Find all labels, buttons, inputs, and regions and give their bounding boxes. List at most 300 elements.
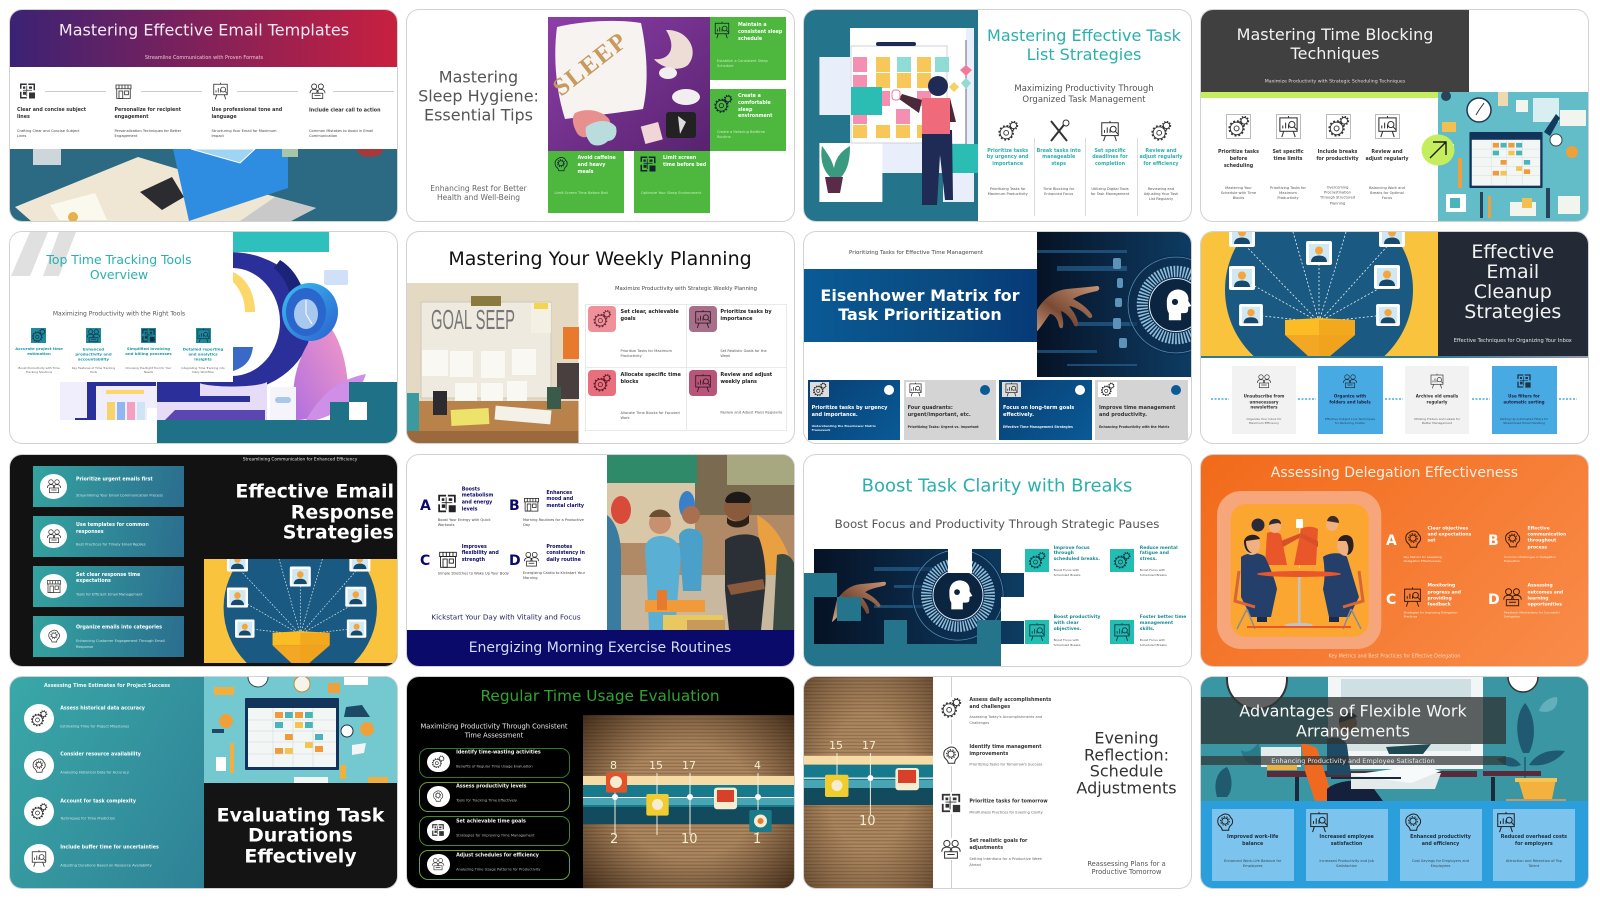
icon	[1256, 373, 1272, 389]
icon: review board	[1375, 114, 1400, 139]
panel: Mastering Your Weekly Planning	[407, 232, 794, 443]
item text: breaks: Procrastination	[1324, 191, 1351, 195]
item text: Boost Focus with	[1140, 568, 1165, 572]
subtitle: Enhancing Rest for Better	[430, 184, 527, 192]
item title: tool 1: Accurate project time	[15, 346, 63, 351]
matrix grid	[585, 304, 787, 431]
photo: hand reaching to digital head, blocky crop	[804, 549, 1025, 666]
title: Evaluating Task	[217, 804, 384, 826]
item text	[1140, 568, 1167, 578]
item title: Prioritize tasks for tomorrow	[969, 800, 1048, 805]
panel: Effective Email Response Strategies	[10, 455, 397, 666]
title: Sleep Hygiene:	[418, 86, 539, 106]
title: Boost Task Clarity with Breaks	[862, 476, 1132, 496]
icon	[40, 574, 67, 598]
title: Task Prioritization	[838, 305, 1002, 324]
item title: tool 3: and billing processes	[125, 351, 172, 356]
tile title	[1410, 835, 1471, 849]
tile text: Create a Relaxing Bedtime	[717, 130, 765, 134]
item text: Mindfulness Practices for Evening Clarity	[969, 810, 1043, 814]
item text: tool 4	[181, 367, 225, 375]
item title: opportunities	[1528, 602, 1562, 608]
item text: Key Metrics for Assessing	[1404, 555, 1442, 559]
tile: screen time	[634, 151, 710, 213]
tile title: Prioritize urgent emails first	[76, 478, 153, 483]
item text: limits: Prioritizing Tasks for	[1270, 186, 1306, 190]
item text	[1054, 568, 1080, 578]
tile title	[1329, 393, 1371, 405]
icon: strength	[438, 549, 458, 569]
item text: Day	[523, 523, 530, 527]
item text: Boost Focus with	[1140, 638, 1165, 642]
icon	[1342, 373, 1358, 389]
tile text: Tools for Efficient Email Management	[76, 592, 143, 596]
illustration: contacts to funnel	[204, 559, 397, 663]
item title: daily routine	[546, 558, 581, 563]
title: Mastering Effective Task	[987, 26, 1181, 44]
pill: adjust schedules	[419, 850, 570, 880]
item text: Estimating Time for Project Milestones	[60, 724, 129, 728]
item text: before scheduling: Schedule with Time	[1221, 191, 1256, 195]
item text: weekly review: Review and Adjust Plans Regularly	[720, 411, 782, 415]
panel: Evaluating Task Durations Effectively	[10, 677, 397, 888]
item title: objectives.	[1054, 627, 1081, 632]
tile title: Increased employee	[1319, 835, 1374, 840]
item text	[969, 856, 1042, 868]
item text: professional tone: Impact	[212, 134, 224, 138]
tile title: Unsubscribe from	[1244, 393, 1284, 398]
title: Mastering	[439, 68, 518, 86]
footer title band	[407, 630, 794, 666]
item title: Account for task complexity	[60, 799, 136, 804]
item text	[1404, 555, 1442, 563]
item text	[1504, 612, 1560, 619]
item text: goals: Prioritize Tasks for Maximum	[620, 349, 672, 353]
tile title: responses	[76, 530, 104, 535]
item title: and energy	[462, 501, 492, 506]
icon: tool 1	[31, 328, 46, 343]
tile text: Enhancing Productivity with the Matrix	[1099, 425, 1169, 429]
item text: breaks: Overcoming	[1327, 186, 1348, 190]
item text: Scheduled Breaks	[1140, 643, 1167, 647]
icon	[1516, 373, 1532, 389]
tile title: expectations	[76, 580, 111, 585]
title: Reflection:	[1084, 745, 1169, 764]
subtitle	[1014, 84, 1154, 105]
subtitle: Maximizing Productivity Through Consistent	[420, 722, 568, 730]
title block	[1438, 232, 1588, 356]
footer subtitle: Key Metrics and Best Practices for Effective Delegation	[1329, 654, 1460, 660]
item title: through	[1054, 551, 1074, 556]
item text	[1054, 638, 1080, 648]
item title	[546, 490, 584, 511]
tile title: regularly	[1427, 399, 1447, 404]
badge	[980, 385, 990, 395]
icon: call to action	[310, 84, 326, 99]
icon	[40, 624, 67, 648]
tile title: comfortable	[738, 101, 771, 106]
item text: Adjusting Durations Based on Resource Availability	[60, 863, 152, 867]
chart: timeline on wood	[583, 715, 794, 888]
panel: Mastering Time Blocking Techniques	[1201, 10, 1588, 220]
item title: progress and	[1428, 590, 1461, 595]
tile: time management	[1095, 380, 1188, 440]
pill text: Strategies for Improving Time Management	[456, 834, 535, 838]
item text: review: Reviewing and	[1148, 187, 1174, 191]
item title: review: adjust regularly	[1139, 155, 1183, 160]
item title: fatigue and	[1140, 551, 1169, 556]
icon: review gear	[1151, 120, 1172, 141]
item title	[1428, 584, 1461, 609]
timeline rule	[950, 677, 952, 888]
item title: deadlines: deadlines for	[1092, 155, 1128, 160]
icon: schedule	[714, 22, 730, 38]
item text: Morning	[523, 576, 538, 580]
icon: skills	[1110, 620, 1134, 644]
tile text: Employees	[1431, 864, 1450, 868]
item text: Scheduled Breaks	[1140, 573, 1167, 577]
tile title: Use filters for	[1508, 393, 1540, 398]
accent bar	[1201, 92, 1438, 98]
tile: comfortable environment	[710, 89, 786, 151]
tile title: automatic sorting	[1503, 399, 1545, 404]
item title: time blocks: blocks	[620, 379, 638, 385]
item title: Assess daily accomplishments	[969, 698, 1051, 703]
tile text: Setting Up Automated Filters for	[1500, 417, 1548, 421]
item title: tool 1	[15, 346, 63, 356]
title: Effectively	[244, 845, 357, 867]
tile text	[1506, 859, 1562, 869]
connector lines	[45, 90, 397, 92]
item title: breaks: Include breaks	[1318, 150, 1357, 155]
item text: review	[1144, 187, 1178, 202]
icon: time blocks	[588, 370, 616, 396]
item text: tool 4: Integrating Time Tracking into	[181, 366, 225, 370]
subtitle: Maximize Productivity with Strategic Weekly Planning	[615, 286, 757, 292]
item text: Scheduled Breaks	[1054, 643, 1080, 647]
divider band	[1201, 356, 1588, 358]
header block	[1201, 10, 1469, 92]
tile title: Four quadrants:	[908, 405, 953, 411]
panel: Evening Reflection: Schedule Adjustments	[804, 677, 1191, 888]
tile text: Optimize Your Sleep Environment	[641, 191, 701, 195]
icon: accomplishments	[940, 697, 962, 719]
item title: tool 2	[75, 346, 112, 361]
item title: subject lines: lines	[17, 115, 30, 120]
icon	[810, 382, 829, 397]
tile: urgent emails	[33, 466, 184, 507]
tile title	[1099, 405, 1175, 419]
tile text: for Reducing Clutter	[1335, 421, 1365, 425]
item text: personalize	[114, 128, 182, 138]
item title: weekly review: Review and adjust	[720, 372, 772, 378]
title: Top Time Tracking Tools	[46, 252, 192, 267]
icon: metabolism	[436, 493, 458, 514]
tile text: Routine	[717, 135, 731, 139]
tile text: Utilizing Folders and Labels for	[1414, 417, 1460, 421]
tile text: Enhanced Work-Life Balance for	[1224, 859, 1281, 863]
tile title: and importance.	[812, 412, 858, 418]
pill: wasting activities	[419, 748, 570, 778]
item text: review: Focus	[1382, 196, 1392, 200]
title: Durations	[248, 824, 353, 846]
icon: routine	[523, 549, 540, 569]
item title: breaks	[1316, 150, 1359, 164]
header band	[10, 10, 397, 67]
item title: review: adjust regularly	[1365, 157, 1409, 162]
item title: limits: Set specific	[1272, 150, 1304, 155]
item title: importance: Prioritize tasks by	[720, 309, 772, 315]
tile title	[812, 405, 887, 419]
tile title: Improve time management	[1099, 405, 1175, 411]
subtitle: Effective Techniques for Organizing Your Inbox	[1454, 338, 1572, 344]
tile text: Increased Productivity and Job	[1319, 859, 1374, 863]
icon: complexity	[24, 797, 54, 826]
tile title	[738, 22, 782, 42]
illustration: person at flexible desk	[1201, 677, 1588, 801]
tile title: Maintain a	[738, 23, 767, 28]
icon	[1495, 811, 1517, 833]
item text	[523, 571, 585, 581]
item text: Morning Routines for a Productive	[523, 518, 584, 522]
item title: throughout	[1528, 539, 1556, 544]
tile: caffeine	[548, 151, 624, 213]
tile title: meals	[578, 170, 594, 175]
tile title	[76, 573, 140, 586]
tile title	[1501, 835, 1567, 849]
illustration: person at task board	[804, 10, 978, 221]
tile text	[1412, 859, 1469, 869]
item title: flexibility and	[462, 551, 499, 556]
tile text	[1500, 417, 1548, 425]
item title: learning	[1528, 596, 1549, 601]
tile title: Organize emails into categories	[76, 626, 162, 631]
item text: review: Balancing Work and	[1369, 186, 1405, 190]
chart labels: numbers	[829, 737, 889, 832]
item text: importance: Set Realistic Goals for the	[720, 349, 767, 353]
icon: objectives	[1025, 620, 1049, 644]
item text: deadlines: Utilizing Digital Tools	[1091, 187, 1129, 191]
item title: deadlines: Set specific	[1094, 148, 1126, 153]
item text: Feedback Mechanisms for Successful	[1504, 611, 1560, 615]
panel: Regular Time Usage Evaluation	[407, 677, 794, 888]
item title: Assessing	[1528, 584, 1553, 589]
item title: outcomes and	[1528, 590, 1563, 595]
title	[1464, 242, 1561, 322]
subtitle: Streamline Communication with Proven Formats	[145, 55, 263, 61]
item text: subject lines	[17, 128, 80, 138]
item text: subject lines: Crafting Clear and Concise Subject	[17, 128, 80, 132]
tile text: Effective Time Management Strategies	[1003, 425, 1073, 429]
item text: limits: Maximum	[1279, 191, 1297, 195]
tile: archive	[1405, 366, 1469, 434]
item text: Energizing Cardio to Kickstart Your	[523, 571, 585, 575]
panel: Energizing Morning Exercise Routines	[407, 455, 794, 666]
item title	[462, 487, 493, 514]
subtitle: Reassessing Plans for a	[1087, 860, 1166, 868]
letter B: B	[509, 498, 520, 514]
item title: before scheduling	[1218, 150, 1259, 170]
tile title: urgent/important, etc.	[908, 412, 971, 418]
item text: call to action	[309, 128, 373, 138]
tile text	[717, 130, 765, 139]
icon: personalize	[116, 84, 132, 99]
chart labels: bottom numbers: 1	[753, 832, 761, 847]
item title: tool 4: Detailed reporting	[183, 346, 223, 351]
item text: review	[1369, 186, 1405, 201]
item title: Improves	[462, 544, 487, 549]
item title	[969, 698, 1051, 712]
tile title: Prioritize tasks by urgency	[812, 405, 887, 411]
tile: employee satisfaction	[1306, 809, 1388, 881]
item text: time blocks	[620, 411, 680, 421]
tile title	[1003, 405, 1074, 419]
item title: tool 2: productivity and	[75, 351, 112, 356]
item text: Ahead	[969, 863, 981, 867]
icon	[1214, 811, 1236, 833]
item title: importance: importance	[720, 316, 752, 322]
item text: breaks: Planning	[1330, 201, 1345, 205]
letter C: C	[420, 553, 430, 569]
subtitle: Kickstart Your Day with Vitality and Focus	[431, 612, 581, 622]
tile: urgency	[808, 380, 900, 440]
item text	[1404, 612, 1457, 619]
item title: tool 3: Simplified invoicing	[127, 346, 170, 351]
item text: Boost Focus with	[1054, 638, 1079, 642]
icon	[40, 524, 67, 548]
tile text	[1224, 859, 1281, 869]
item title: weekly review: weekly plans	[720, 379, 757, 385]
item text: review: List Regularly	[1149, 198, 1173, 202]
subtitle: Enhancing Productivity and Employee Satisfaction	[1271, 757, 1435, 765]
item title: prioritize: importance	[992, 162, 1023, 167]
subtitle: Health and Well-Being	[437, 192, 520, 202]
item text: review: Breaks for Optimal	[1370, 191, 1404, 195]
title: Effective Email	[235, 480, 394, 502]
item title: Foster better time	[1140, 615, 1186, 620]
item title: review: Review and	[1145, 148, 1177, 153]
item title: Monitoring	[1428, 584, 1455, 589]
item title: limits: time limits	[1274, 157, 1302, 162]
icon: professional tone	[213, 82, 228, 100]
icon: chart	[1276, 114, 1301, 139]
illustration: abstract clock	[10, 232, 397, 443]
item text: review: Adjusting Your Task	[1144, 192, 1178, 196]
panel: Boost Task Clarity with Breaks	[804, 455, 1191, 666]
item title: improvements	[969, 752, 1008, 757]
title: Overview	[90, 267, 148, 282]
item title: before scheduling: before	[1230, 157, 1247, 162]
panel: Mastering Effective Task List Strategies	[804, 10, 1191, 220]
item text	[1504, 555, 1556, 563]
tile title: Organize with	[1334, 393, 1366, 398]
tile text	[1246, 417, 1282, 425]
item text: breaks: Through Structured	[1320, 196, 1355, 200]
item title: with clear	[1054, 621, 1079, 626]
tile title	[663, 155, 706, 168]
item text: tool 2: Key Features of Time Tracking	[72, 366, 115, 370]
tile text: Framework	[812, 428, 830, 432]
chart labels: numbers: 10	[859, 814, 876, 829]
item title	[1140, 546, 1178, 563]
letter A: A	[1386, 533, 1397, 549]
item title: professional tone: Use professional tone and	[212, 108, 282, 113]
tile text: Attraction and Retention of Top	[1506, 859, 1562, 863]
item title: process	[1528, 545, 1547, 550]
item text: Scheduled Breaks	[1054, 573, 1080, 577]
item title: deadlines	[1092, 148, 1128, 167]
pill title: Assess productivity levels	[456, 785, 526, 790]
item text: deadlines	[1090, 187, 1130, 196]
item text	[969, 714, 1042, 726]
item title: Set realistic goals for	[969, 839, 1027, 844]
item title: review	[1139, 148, 1183, 167]
item title: time blocks: Allocate specific time	[620, 372, 681, 378]
item title: adjustments	[969, 846, 1003, 851]
icon: heart	[554, 157, 568, 172]
letter A: A	[420, 498, 431, 514]
chart labels: top numbers: 15	[649, 759, 663, 772]
photo: outdoor fitness event	[607, 455, 794, 630]
badge	[1075, 385, 1085, 395]
photo: sleep flat lay: SLEEP	[548, 27, 633, 102]
item title: feedback	[1428, 602, 1451, 608]
subtitle: Time Assessment	[465, 731, 523, 739]
item title: mental clarity	[546, 504, 584, 509]
item title: Effective	[1528, 527, 1550, 532]
item title	[546, 544, 585, 565]
icon: goals	[588, 306, 616, 332]
tile title: Reduced overhead costs	[1501, 835, 1567, 840]
title band	[804, 269, 1037, 342]
title: Essential Tips	[424, 106, 533, 124]
tile title: Enhanced productivity	[1410, 835, 1471, 840]
item title	[969, 839, 1027, 853]
item title: before scheduling: scheduling	[1224, 163, 1253, 168]
tile title: Archive old emails	[1416, 393, 1458, 398]
item title: break tasks	[1037, 148, 1081, 167]
icon: historical data	[24, 704, 54, 733]
item text: Setting Intentions for a Productive Week	[969, 857, 1042, 861]
chart labels: top numbers	[603, 757, 773, 775]
icon	[427, 752, 450, 772]
item title: tool 4	[183, 346, 223, 361]
item title: and challenges	[969, 705, 1010, 710]
icon: mood	[523, 495, 540, 513]
item text: prioritize: Maximum Productivity	[988, 192, 1028, 196]
pill text: Benefits of Regular Time Usage Evaluation	[456, 765, 533, 769]
item title: goals: Set clear, achievable	[620, 309, 679, 315]
tile text	[76, 639, 165, 650]
tile text: Limit Screen Time Before Bed	[554, 191, 608, 195]
icon: importance	[689, 306, 717, 332]
icon: focus	[1025, 549, 1049, 572]
tile title: Improved work-life	[1227, 835, 1278, 840]
tile: filters	[1492, 366, 1557, 434]
item text: Challenges	[969, 721, 989, 725]
item text: Practices	[1404, 614, 1417, 618]
icon: gears	[998, 120, 1018, 141]
tile title: Create a	[738, 94, 761, 99]
item title: tool 2: Enhanced	[83, 346, 104, 351]
item title: consistency in	[546, 551, 585, 556]
subtitle	[430, 184, 527, 202]
illustration: calendar flat lay	[204, 677, 397, 783]
title: Cleanup	[1474, 281, 1552, 303]
tile title	[1244, 393, 1284, 411]
letter C: C	[1386, 592, 1396, 608]
panel: Eisenhower Matrix for Task Prioritization	[804, 232, 1191, 443]
